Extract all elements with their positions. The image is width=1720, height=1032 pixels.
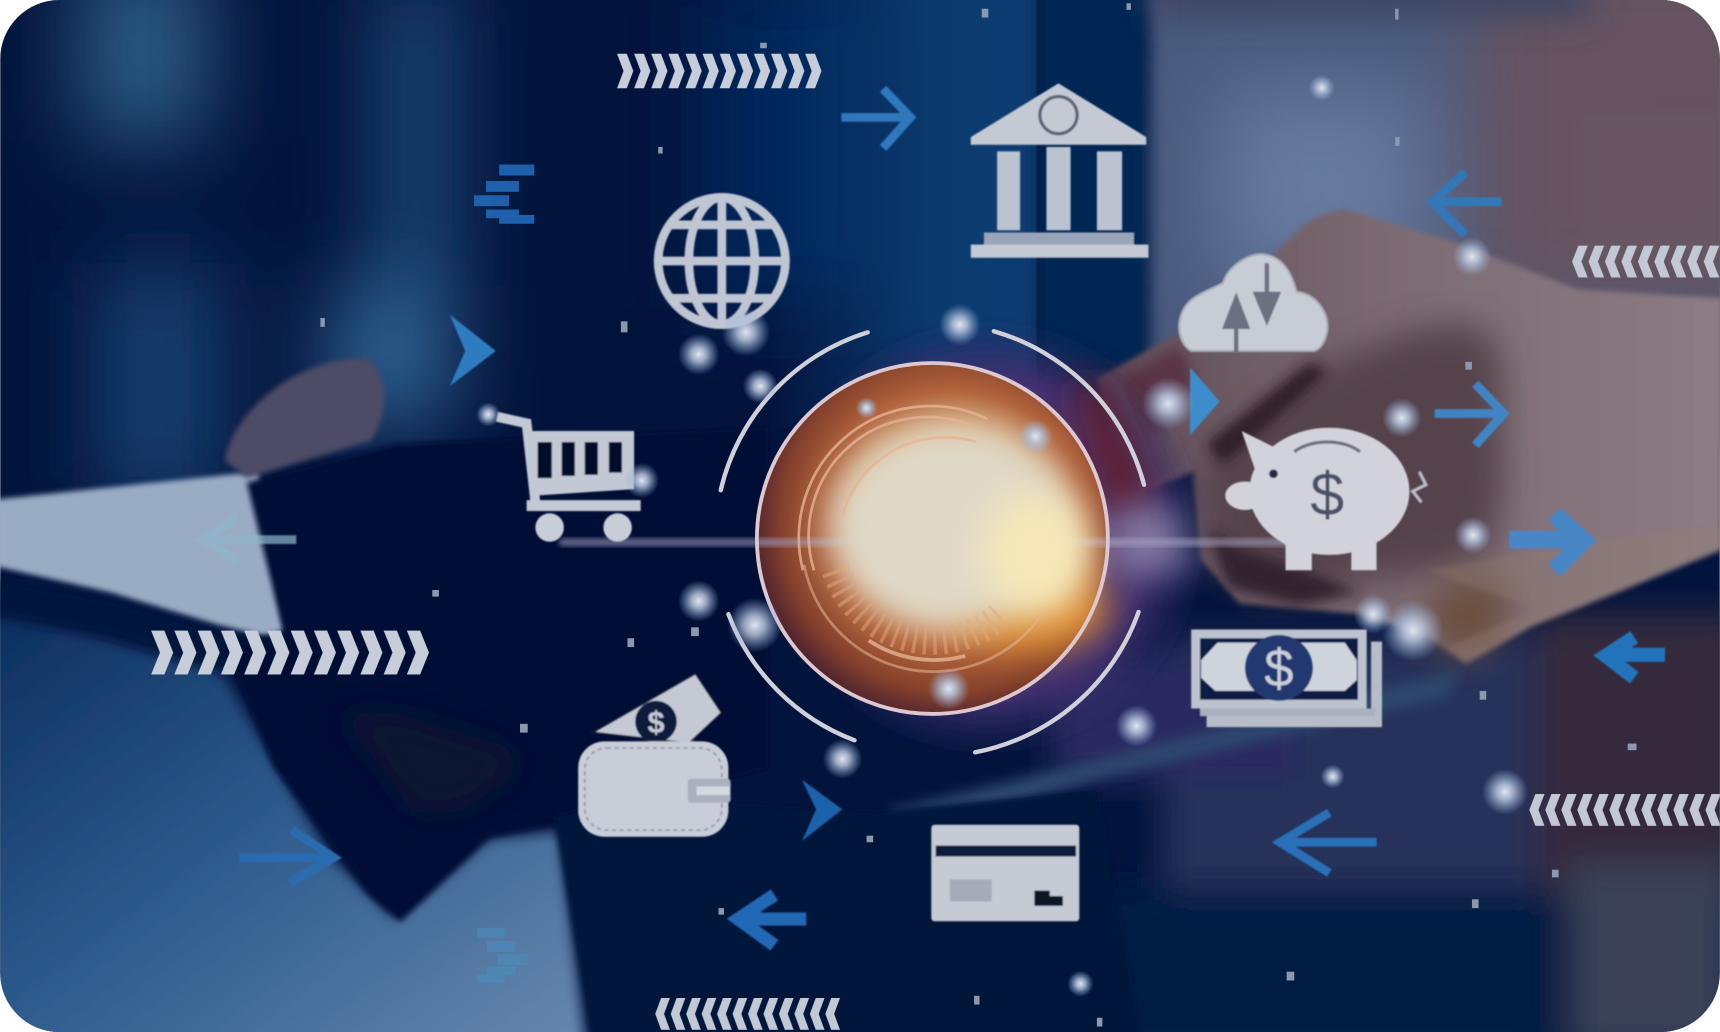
dark red flare behind the rings (1069, 378, 1152, 515)
lower-left blue sleeve (0, 603, 587, 1032)
dark hand on tablet (225, 428, 768, 921)
icon: banknote stack: $ (1264, 640, 1294, 699)
thumb (225, 359, 384, 478)
icon: cloud transfer (1179, 254, 1327, 353)
hand shadows (1201, 324, 1505, 592)
central glowing core (560, 318, 1294, 757)
pixel clusters (474, 165, 534, 983)
blue chevrons (450, 315, 1220, 841)
inner rings (799, 406, 1042, 672)
warm lower-right glow (954, 567, 1108, 650)
small specks (320, 3, 1636, 1027)
arrow: fat right (1509, 514, 1584, 570)
arrow: top center right (841, 89, 910, 148)
tablet edge lower right (890, 673, 1456, 811)
light particles (476, 75, 1528, 997)
arrow: left bottom (1280, 813, 1377, 873)
cluster bottom left (477, 928, 528, 983)
arrow: left bottom center (738, 895, 806, 945)
chevron strip: upper right (1572, 246, 1720, 277)
chevron strip: left (150, 631, 429, 674)
arrow: fat left lower right (1606, 637, 1665, 678)
icon: wallet with banknote (578, 673, 731, 837)
arrow: top right left (1432, 172, 1502, 235)
chevron strip: top (617, 54, 822, 88)
lavender flare right of the ring (1110, 502, 1193, 576)
icon: wallet with banknote: $ (647, 705, 665, 740)
arrow: faint left on tablet (254, 534, 298, 545)
radial hatching at the bottom of the core (836, 570, 1004, 641)
tablet (0, 472, 288, 642)
blue arrows (203, 89, 1665, 945)
chevron strip: lower right (1529, 794, 1720, 826)
main ring (757, 363, 1108, 714)
outer arc segments (721, 331, 1144, 752)
lens flare line (560, 538, 1294, 546)
icon: globe (657, 196, 787, 326)
icon: piggy bank: $ (1310, 460, 1344, 529)
right hand (1097, 208, 1720, 664)
cluster top left (474, 165, 534, 224)
arrow: right lower left (239, 830, 334, 883)
icon: bank building (971, 83, 1148, 258)
icon: credit card (931, 825, 1079, 921)
icon: banknote stack (1191, 630, 1382, 727)
arrow: right of cloud right (1435, 384, 1504, 445)
icon: shopping cart (497, 417, 641, 542)
icon: piggy bank (1225, 428, 1426, 570)
chevron strip: bottom (655, 998, 840, 1030)
orb (757, 363, 1108, 714)
bright cream core (829, 426, 1075, 627)
